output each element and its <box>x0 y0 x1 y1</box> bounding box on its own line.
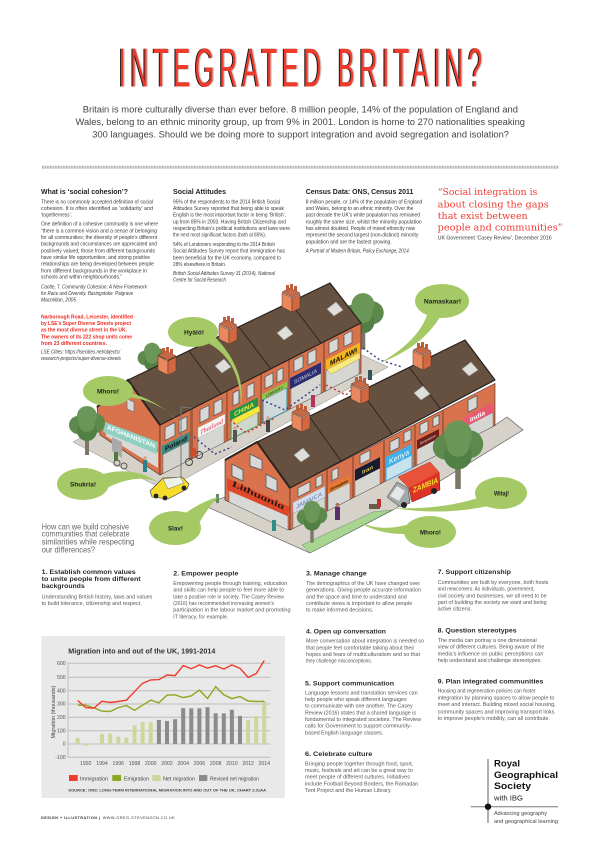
text block: social attitudes: English is the most important factor in being ‘British’, <box>173 213 286 219</box>
step 5: to communicate with one another. The Casey <box>305 704 413 710</box>
truck: Zambia <box>387 462 440 508</box>
legend: Emigration <box>124 776 149 782</box>
text block: census data: A Portrait of Modern Britain, Policy Exchange, 2014. <box>305 249 410 255</box>
text block: what is social cohesion: cohesion. It is often identified as ‘solidarity’ and <box>41 206 153 212</box>
callout: Narborough Road <box>41 314 134 362</box>
step 4: that people feel comfortable talking about their <box>306 645 414 651</box>
text block: what is social cohesion: have similar life opportunities; and strong positive <box>41 255 150 261</box>
text block: census data: roughly the same size, whilst the minority population <box>306 219 422 225</box>
x axis labels: 2008 <box>210 761 222 767</box>
tree behind upper terrace <box>138 343 166 382</box>
immigration line <box>78 660 264 708</box>
shop sign: Malawi: MALAWI <box>330 346 357 368</box>
callout: Narborough Road: as the most diverse street in the UK. <box>41 328 127 334</box>
callout: Narborough Road: by LSE’s Super Diverse Streets project <box>41 321 131 327</box>
step 8 <box>438 628 544 664</box>
callout: Narborough Road: LSE Cities: https://lsecities.net/objects/ <box>41 349 120 355</box>
chimneys: upper terrace <box>158 284 300 375</box>
lower roof <box>225 340 495 488</box>
logo: Royal Geographical Society: Geographical <box>494 770 558 781</box>
step 7: and newcomers. As individuals, government, <box>438 587 535 593</box>
y axis title: Migration (thousands) <box>51 685 57 738</box>
text block: census data: and Wales, belong to an ethnic minority. Over the <box>306 206 413 212</box>
x axis labels: 2004 <box>177 761 189 767</box>
panel: migration chart <box>42 636 285 798</box>
question text: our differences? <box>42 544 95 554</box>
shop sign: Jamaica <box>293 486 325 513</box>
shop sign: dark red <box>417 429 439 449</box>
step 8: view of different cultures. Being aware of the <box>438 645 544 651</box>
shop sign: Library green <box>262 382 287 400</box>
text block: what is social cohesion: schools and within neighbourhoods.” <box>41 275 122 281</box>
callout: Narborough Road: from 23 different countries. <box>41 341 107 347</box>
text block: what is social cohesion: for all communities; the diversity of people’s different <box>41 235 157 241</box>
shop sign: dark red: Bangladesh <box>420 434 436 446</box>
tree behind upper terrace right <box>342 293 384 350</box>
y axis labels: 400 <box>57 688 66 694</box>
intro text <box>76 105 525 140</box>
upper roof <box>97 283 361 425</box>
y axis labels: -100 <box>55 755 66 761</box>
text block: census data: has almost doubled. People of mixed ethnicity now <box>306 226 416 232</box>
title: INTEGRATED BRITAIN? <box>120 38 483 100</box>
tree small lawn <box>297 501 327 542</box>
text block: what is social cohesion: ‘togetherness’. <box>41 213 72 219</box>
speech bubble: Hyàló: Hyàló! <box>184 330 204 336</box>
step 7: active citizens. <box>438 607 472 613</box>
lower terrace front wall <box>290 383 495 530</box>
chart title: Migration into and out of the UK, 1991-2014 <box>68 647 216 656</box>
speech bubble: Namaskaar: Namaskaar! <box>424 300 461 306</box>
text block: what is social cohesion: Macmillan, 2005 <box>41 298 77 304</box>
step 1: Understanding British history, laws and values <box>42 594 153 600</box>
speech bubble: Shukria: Shukria! <box>70 482 96 488</box>
upper terrace front wall <box>160 323 361 475</box>
x axis labels: 1992 <box>80 761 92 767</box>
step 3 <box>306 572 421 614</box>
step 5 <box>305 681 421 736</box>
text block: what is social cohesion: What is ‘social cohesion’? <box>41 187 128 196</box>
text block: what is social cohesion: positively valued; those from different backgrounds <box>41 248 155 254</box>
text block: what is social cohesion: There is no commonly accepted definition of social <box>41 200 153 206</box>
pull quote: people and communities” <box>438 223 563 234</box>
shop sign: Poland: Poland <box>165 434 187 453</box>
shop sign: China: CHINA <box>234 402 254 418</box>
text block: social attitudes: 28% elsewhere in Britain. <box>173 262 226 268</box>
step 7: part of building the society we want and being <box>438 600 547 606</box>
step 2: 2. Empower people <box>173 572 239 578</box>
step 6: Tent Project and the Human Library. <box>305 788 392 794</box>
step 2: (2016) has recommended increasing women’s <box>173 601 274 607</box>
text block: what is social cohesion: relationships are being developed between people <box>41 262 154 268</box>
design credit: WWW.GREG-STEVENSON.CO.UK <box>103 815 175 820</box>
y axis labels: 500 <box>57 675 66 681</box>
step 9: 9. Plan integrated communities <box>438 679 544 685</box>
step 9: meet and interact. Building mixed social housing, <box>438 702 556 708</box>
text block: social attitudes: Centre for Social Research <box>173 278 226 284</box>
x axis labels: 2012 <box>242 761 254 767</box>
x axis labels: 2014 <box>259 761 270 767</box>
intro text: 300 languages. Should we be doing more to support integration and avoid segregation and isolation? <box>92 129 509 140</box>
shop sign: Iran <box>355 457 380 481</box>
step 6: include Football Beyond Borders, the Ramadan <box>305 781 418 787</box>
question text: communities that celebrate <box>42 529 130 539</box>
gable wall: Afghanistan shop <box>97 380 160 475</box>
logo: Royal Geographical Society: Advancing geography <box>494 811 548 817</box>
shop sign: Iran: Iran <box>362 465 373 476</box>
step 8: 8. Question stereotypes <box>438 628 517 634</box>
truck: Zambia: ZAMBIA <box>413 475 438 495</box>
step 7: civil society and businesses, we all need to be <box>438 593 547 599</box>
text block: social attitudes: Social Attitudes <box>173 187 226 196</box>
speech bubble: Mhoro left: Mhoro! <box>97 390 119 396</box>
step 5: calls for Government to support community- <box>305 724 412 730</box>
speech bubble: Mhoro right: Mhoro! <box>420 530 441 536</box>
logo: Royal Geographical Society: Royal <box>494 759 520 770</box>
text block: social attitudes: been beneficial for the UK economy, compared to <box>173 255 281 261</box>
lawn <box>302 510 392 553</box>
pull quote: “Social integration is <box>438 187 537 198</box>
step 2: and skills can help people to feel more able to <box>173 588 284 594</box>
legend: Immigration <box>80 776 108 782</box>
step 1 <box>42 570 153 607</box>
pull quote <box>438 187 563 241</box>
step 7: 7. Support citizenship <box>438 570 511 576</box>
speech bubble: Mhoro left <box>83 376 187 434</box>
step 2: participation in the labour market and promoting <box>173 608 291 614</box>
question text: How can we build cohesive <box>42 521 129 531</box>
speech bubble: Namaskaar <box>380 284 469 363</box>
y axis labels: 300 <box>57 702 66 708</box>
step 7 <box>438 570 549 613</box>
shop sign: Somalia: SOMALIA <box>294 369 317 386</box>
speech bubble: Shukria <box>57 468 158 500</box>
text block: what is social cohesion <box>41 187 158 304</box>
step 9: Housing and regeneration policies can foster <box>438 689 536 695</box>
title: INTEGRATED BRITAIN? <box>118 38 481 100</box>
shop sign: Thailand <box>198 414 225 438</box>
step 2: Empowering people through training, education <box>173 581 287 587</box>
step 1: backgrounds <box>42 584 85 590</box>
step 8: The media can portray a one dimensional <box>438 638 537 644</box>
x axis labels: 2010 <box>226 761 238 767</box>
pavement: upper street <box>73 355 388 490</box>
revised net migration bars <box>157 707 242 744</box>
intro text: Britain is more culturally diverse than ever before. 8 million people, 14% of the population of England and <box>83 105 518 116</box>
pavement: lower street <box>203 417 523 553</box>
pull quote: UK Government ‘Casey Review’, December 2016 <box>438 235 552 241</box>
x axis labels: 1996 <box>113 761 124 767</box>
design credit: DESIGN + ILLUSTRATION | <box>41 815 100 820</box>
step 3: contribute views is important to allow people <box>306 601 412 607</box>
step 8: help understand and challenge stereotypes. <box>438 658 542 664</box>
net migration bars <box>76 702 266 746</box>
y axis labels: 100 <box>57 728 66 734</box>
callout: Narborough Road: research-projects/super-diverse-streets <box>41 356 121 362</box>
text block: social attitudes: up from 85% in 2003. Having British Citizenship and <box>173 219 286 225</box>
title: INTEGRATED BRITAIN? <box>119 38 482 100</box>
step 4: More conversation about integration is needed so <box>306 639 424 645</box>
emigration line <box>78 687 264 712</box>
x axis labels: 2006 <box>194 761 205 767</box>
speech bubble: Witaj <box>393 477 527 512</box>
y axis labels: 0 <box>63 742 66 748</box>
tree right lower <box>433 420 483 489</box>
step 9: to improve people’s mobility, can all contribute. <box>438 716 550 722</box>
pull quote: that exist between <box>438 211 528 222</box>
design credit <box>41 815 175 820</box>
step 5: fundamental to integrated societies. The Review <box>305 717 421 723</box>
y axis labels: 600 <box>57 661 66 667</box>
speech bubble: Witaj: Witaj! <box>494 492 509 498</box>
logo: Royal Geographical Society: with IBG <box>493 796 523 803</box>
shop sign: China <box>230 396 260 428</box>
shop sign: Thailand: Thailand <box>200 418 224 437</box>
x axis labels: 2000 <box>145 761 157 767</box>
step 9: integration by planning spaces to allow people to <box>438 695 554 701</box>
callout: Narborough Road: Narborough Road, Leicester, identified <box>41 314 134 320</box>
speech bubble: Hyàló <box>168 317 242 405</box>
logo: Royal Geographical Society <box>471 759 558 825</box>
text block: social attitudes: Social Attitudes Survey report that immigration has <box>173 249 285 255</box>
y axis labels <box>55 661 66 761</box>
gable wall: Lithuania shop <box>225 442 290 530</box>
legend <box>69 775 259 782</box>
text block: census data: population and are the fastest growing. <box>306 239 392 245</box>
text block: census data: represent the second largest (non-distinct) minority <box>306 233 419 239</box>
step 2: IT literacy, for example. <box>173 614 228 620</box>
shop sign: Somalia <box>290 362 321 389</box>
x axis labels <box>80 761 270 767</box>
step 3: and the space and time to understand and <box>306 594 407 600</box>
text block: social attitudes: British Social Attitudes Survey 31 (2014), National <box>173 271 276 277</box>
x axis labels: 1998 <box>129 761 140 767</box>
step 3: The demographics of the UK have changed over <box>306 581 420 587</box>
text block: what is social cohesion: One definition of a cohesive community is one where <box>41 222 158 228</box>
shop sign: Zimbabwe: Zimbabwe <box>330 478 349 492</box>
step 3: to make informed decisions. <box>306 608 373 614</box>
illustration: street of shops <box>69 283 523 553</box>
speech bubble: Slav: Slav! <box>168 526 183 532</box>
text block: social attitudes: 54% of Londoners responding to the 2014 British <box>173 242 275 248</box>
pull quote: about closing the gaps <box>438 199 549 210</box>
text block: social attitudes: 95% of the respondents to the 2014 British Social <box>173 200 280 206</box>
step 6: Bringing people together through food, sport, <box>305 761 414 767</box>
step 1: to build tolerance, citizenship and respect. <box>42 601 142 607</box>
text block: social attitudes <box>173 187 290 284</box>
step 5: based English language classes. <box>305 730 383 736</box>
gable wall: Afghanistan shop: AFGHANISTAN <box>107 424 155 450</box>
step 9 <box>438 679 556 722</box>
question text <box>42 521 135 554</box>
text block: census data <box>305 187 422 255</box>
step 6: music, festivals and art can be a great way to <box>305 768 413 774</box>
text block: what is social cohesion: from different backgrounds in the workplace in <box>41 268 147 274</box>
shop sign: India <box>463 402 493 428</box>
y axis labels: 200 <box>57 715 66 721</box>
step 8: media’s influence on public perceptions can <box>438 651 543 657</box>
step 7: Communities are built by everyone, both hosts <box>438 580 549 586</box>
step 4 <box>306 629 424 665</box>
step 5: Review (2016) states that a shared language is <box>305 710 416 716</box>
step 5: 5. Support communication <box>305 681 394 687</box>
shop sign: Malawi <box>326 343 360 377</box>
person and bench <box>216 494 381 531</box>
shop sign: Kenya: Kenya <box>389 447 409 466</box>
chart source: SOURCE: ONS: LONG-TERM INTERNATIONAL MIGRATION INTO AND OUT OF THE UK, CHART 2.01AA <box>68 788 266 792</box>
text block: what is social cohesion: Cantle, T. Community Cohesion: A New Framework <box>41 284 147 290</box>
text block: social attitudes: respecting Britain’s political institutions and laws were <box>173 226 290 232</box>
step 5: help people who speak different languages <box>305 697 407 703</box>
text block: census data: 8 million people, or 14% of the population of England <box>306 200 422 206</box>
step 1: 1. Establish common values <box>42 570 136 576</box>
legend: Net migration <box>163 776 195 782</box>
step 4: hopes and fears of multiculturalism and so that <box>306 652 421 658</box>
step 9: community spaces and improving transport links <box>438 709 555 715</box>
question text: similarities while respecting <box>42 536 135 546</box>
step 3: 3. Manage change <box>306 572 367 578</box>
step 2 <box>173 572 291 620</box>
shop sign: Jamaica: JAMAICA <box>296 491 323 511</box>
text block: census data: Census Data: ONS, Census 2011 <box>306 187 414 196</box>
step 6 <box>305 752 418 794</box>
legend: Revised net migration <box>210 776 259 782</box>
x axis labels: 2002 <box>161 761 173 767</box>
callout: Narborough Road: The owners of its 222 shop units come <box>41 334 132 340</box>
text block: census data: past decade the UK’s white population has remained <box>306 213 420 219</box>
step 3: generations. Giving people accurate information <box>306 588 421 594</box>
grid lines <box>68 662 271 757</box>
car: yellow taxi <box>150 477 189 500</box>
step 5: Language lessons and translation services can <box>305 690 418 696</box>
text block: social attitudes: Attitudes Survey reported that being able to speak <box>173 206 284 212</box>
step 2: take a positive role in society. The Casey Review <box>173 594 284 600</box>
step 1: to unite people from different <box>42 577 141 583</box>
logo: Royal Geographical Society: and geographical learning <box>494 819 558 825</box>
chimneys: lower terrace <box>292 342 431 432</box>
step 4: 4. Open up conversation <box>306 629 386 635</box>
step 6: 6. Celebrate culture <box>305 752 373 758</box>
people and bicycles upper street <box>114 370 372 478</box>
shop sign: India: India <box>470 410 485 424</box>
tree on pavement left <box>69 406 105 455</box>
x axis labels: 1994 <box>96 761 108 767</box>
step 4: they challenge misconceptions. <box>306 659 372 665</box>
text block: social attitudes: the next most significant factors (both at 85%). <box>173 233 266 239</box>
text block: what is social cohesion: for Race and Diversity. Basingstoke: Palgrave <box>41 291 133 297</box>
gable wall: Lithuania shop: Lithuania <box>231 479 284 513</box>
logo: Royal Geographical Society: Society <box>494 781 532 792</box>
text block: what is social cohesion: “there is a common vision and a sense of belonging <box>41 228 157 234</box>
speech bubble: Slav <box>149 497 218 545</box>
intro text: Wales, belong to an ethnic minority group, up from 9% in 2001. London is home to 270 nationalities speaking <box>76 117 525 128</box>
speech bubble: Mhoro right <box>353 516 456 548</box>
step 6: meet people of different cultures. Initiatives <box>305 775 410 781</box>
bunting <box>194 348 402 454</box>
shop sign: Library green: LIBRARY <box>266 385 283 398</box>
text block: what is social cohesion: backgrounds and circumstances are appreciated and <box>41 242 157 248</box>
